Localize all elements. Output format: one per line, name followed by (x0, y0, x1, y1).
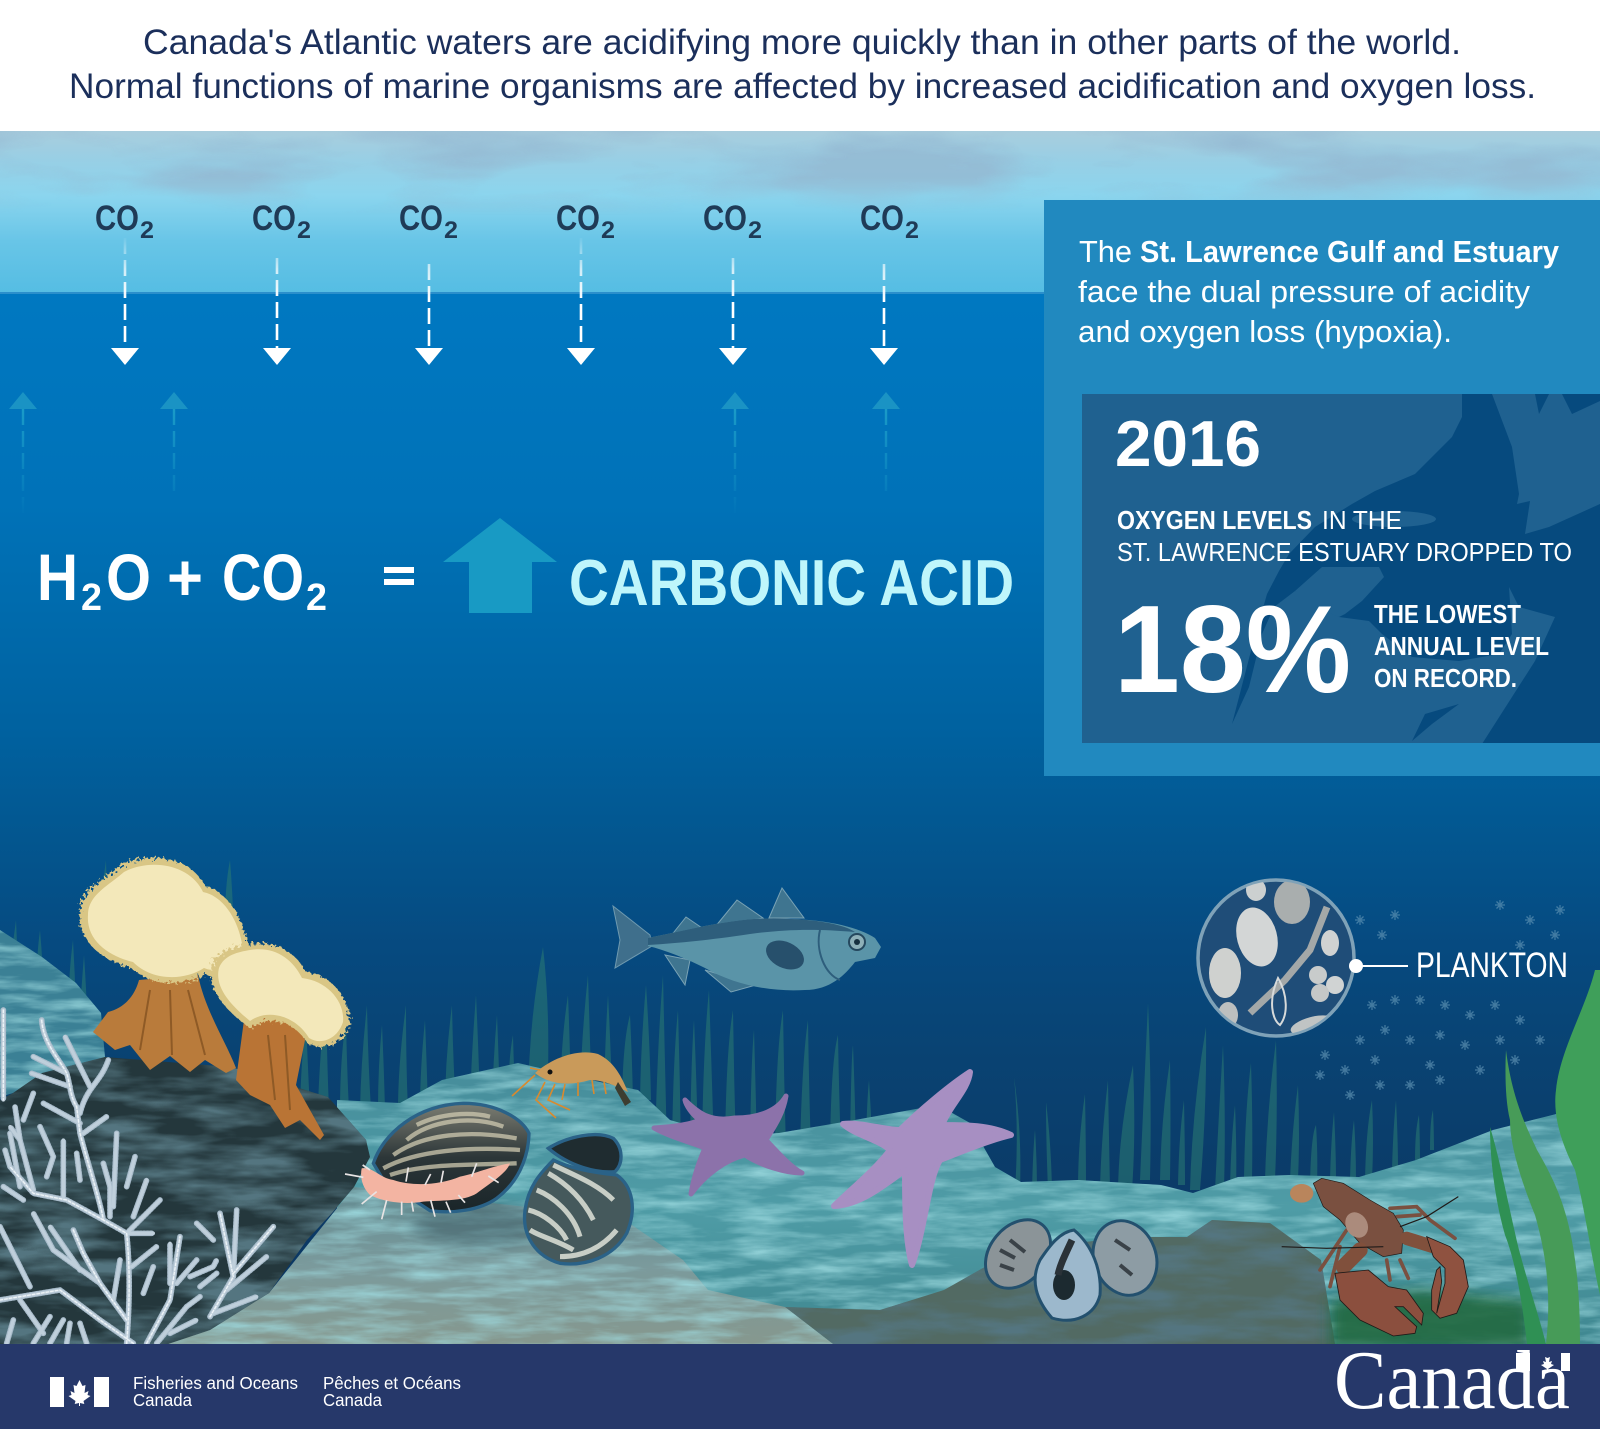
equation H2O + CO2 =: CO (222, 540, 304, 614)
anemone left (80, 858, 249, 1073)
lowest level note: ON RECORD. (1374, 663, 1517, 693)
sky (0, 131, 1600, 293)
starfish small (654, 1096, 802, 1194)
green patch by lobster (1330, 1290, 1530, 1350)
CO2 labels row: CO (399, 199, 443, 238)
equation H2O + CO2 =: H (37, 540, 78, 614)
downward CO2 arrows (111, 238, 898, 365)
equation H2O + CO2 =: 2 (81, 577, 102, 619)
ocean water (0, 292, 1600, 1344)
clam left with pink worm (345, 1103, 529, 1219)
CO2 labels row: 2 (444, 217, 458, 244)
plankton label with pointer: PLANKTON (1416, 946, 1568, 985)
Government of Canada flag (50, 1377, 109, 1407)
starfish large (834, 1072, 1011, 1265)
lobster (1282, 1178, 1468, 1336)
panel intro text: face the dual pressure of acidity (1078, 274, 1531, 309)
panel intro text: and oxygen loss (hypoxia). (1078, 314, 1452, 349)
big up arrow (443, 518, 557, 613)
header text line 1: Canada's Atlantic waters are acidifying more quickly than in other parts of the world. (143, 23, 1461, 62)
equation H2O + CO2 =: O (106, 540, 151, 614)
CO2 labels row (95, 199, 919, 244)
equation H2O + CO2 = (37, 540, 414, 619)
department name English: Canada (133, 1390, 192, 1410)
Canada wordmark: Canada (1334, 1334, 1570, 1427)
plankton specks (1315, 900, 1565, 1100)
lowest level note: THE LOWEST (1374, 599, 1521, 629)
header text line 2: Normal functions of marine organisms are affected by increased acidification and oxygen loss. (69, 67, 1536, 106)
department name French: Pêches et Océans (323, 1373, 461, 1393)
upward faded arrows (9, 392, 900, 520)
rock: dark left (0, 1057, 370, 1344)
panel intro text (1078, 234, 1560, 349)
seagrass background (10, 860, 1434, 1190)
18 percent: 18% (1114, 581, 1351, 719)
fish (613, 888, 881, 992)
CO2 labels row: CO (703, 199, 747, 238)
map of gulf (1232, 394, 1600, 744)
anemone right (211, 943, 349, 1140)
rock: mossy brown (785, 1220, 1335, 1344)
CO2 labels row: 2 (601, 217, 615, 244)
footer band (0, 1334, 1600, 1429)
gravel shadow under clams (410, 1203, 550, 1247)
oxygen levels text (1117, 505, 1572, 567)
CO2 labels row: CO (860, 199, 904, 238)
panel: St. Lawrence (1044, 200, 1600, 776)
lowest level note: ANNUAL LEVEL (1374, 631, 1549, 661)
oysters (972, 1207, 1167, 1320)
rock: teal back left (0, 930, 105, 1097)
plankton label with pointer (1349, 946, 1568, 985)
year 2016: 2016 (1115, 407, 1261, 480)
dark stat box with map (1082, 394, 1600, 744)
panel intro text: St. Lawrence Gulf and Estuary (1140, 234, 1560, 269)
oxygen levels text: OXYGEN LEVELS (1117, 505, 1312, 535)
CO2 labels row: 2 (748, 217, 762, 244)
equation H2O + CO2 =: 2 (306, 577, 327, 619)
shrimp (512, 1052, 631, 1118)
coral white (0, 1010, 273, 1343)
carbonic acid label: CARBONIC ACID (569, 546, 1014, 619)
panel intro text: The (1079, 234, 1132, 269)
clam right (525, 1135, 632, 1264)
CO2 labels row: CO (252, 199, 296, 238)
CO2 labels row: 2 (297, 217, 311, 244)
lowest level note (1374, 599, 1549, 693)
department name French: Canada (323, 1390, 382, 1410)
CO2 labels row: CO (95, 199, 139, 238)
department name French (323, 1373, 461, 1410)
CO2 labels row: CO (556, 199, 600, 238)
CO2 labels row: 2 (905, 217, 919, 244)
rock: teal middle ridge (337, 1063, 1600, 1344)
seaweed right (1490, 970, 1600, 1344)
header band (0, 0, 1600, 131)
department name English (133, 1373, 298, 1410)
plankton magnifier circle (1198, 879, 1354, 1038)
oxygen levels text: IN THE (1322, 505, 1402, 535)
equation H2O + CO2 =: + (167, 540, 203, 614)
rock: grey front (168, 1187, 833, 1344)
CO2 labels row: 2 (140, 217, 154, 244)
pink worm (345, 1163, 510, 1219)
department name English: Fisheries and Oceans (133, 1373, 298, 1393)
